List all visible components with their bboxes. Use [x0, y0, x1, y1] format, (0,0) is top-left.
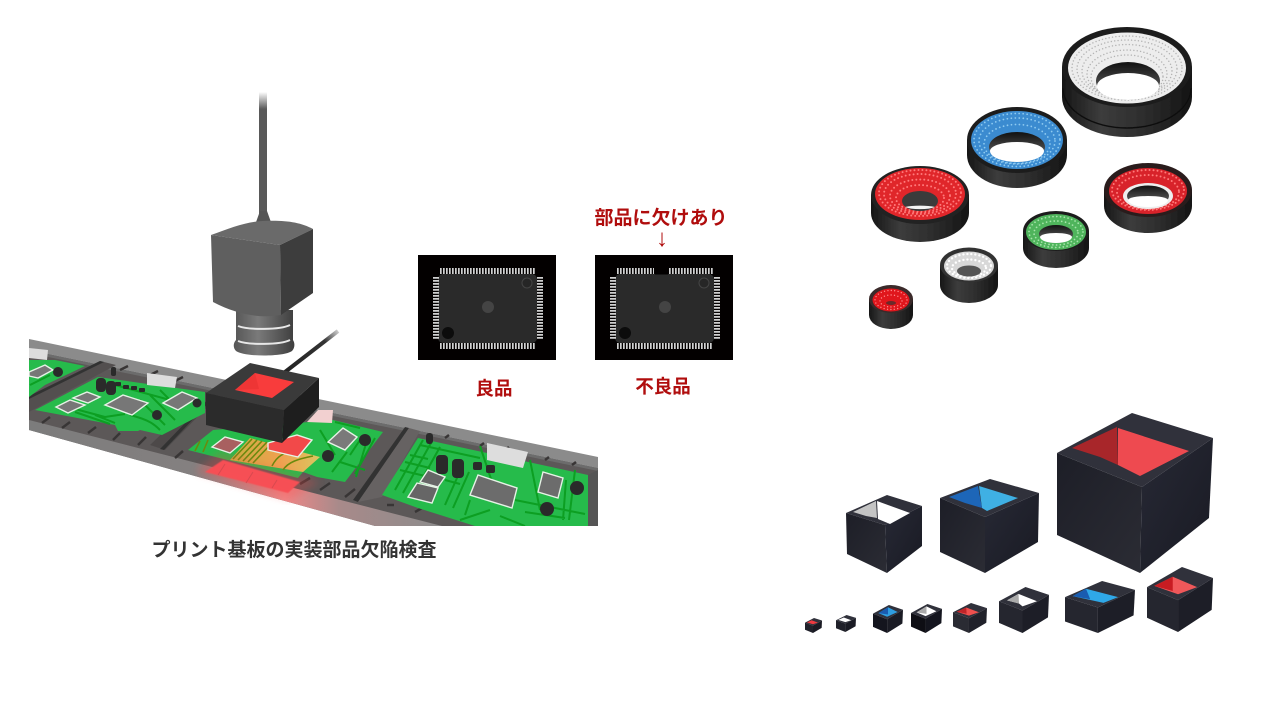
- conveyor belt: [29, 339, 598, 526]
- arrow: pointing to defect: ↓: [656, 225, 668, 252]
- surface mount chips: [29, 365, 563, 508]
- capacitors: [53, 367, 584, 516]
- small light: red low: [953, 603, 987, 633]
- small square light row: [805, 567, 1213, 633]
- PCB boards: [29, 360, 588, 526]
- ring light: red large: [871, 166, 969, 242]
- camera lens: [234, 310, 294, 356]
- ring light: tiny red: [869, 285, 913, 329]
- inspection image: defective part: [595, 255, 733, 360]
- small light: blue wide: [1065, 581, 1135, 633]
- inspection image: good part: [418, 255, 556, 360]
- square light: large red: [1057, 413, 1213, 573]
- ring light: small white: [940, 248, 998, 303]
- connectors: [29, 348, 528, 468]
- square light: medium white: [846, 495, 922, 573]
- square light: medium blue: [940, 479, 1039, 573]
- small light: blue: [873, 605, 903, 633]
- ring lights group: [869, 27, 1192, 329]
- small light: tiny red: [805, 618, 822, 633]
- small light: white wide: [999, 587, 1049, 633]
- orange lit zone on board: [230, 438, 320, 472]
- label: good part: 良品: [475, 378, 513, 399]
- ring light: large white: [1062, 27, 1192, 137]
- small light: red tall: [1147, 567, 1213, 632]
- dividers: [29, 361, 116, 412]
- ring light: blue: [967, 107, 1067, 188]
- light cable: [285, 331, 338, 372]
- label: defect note: 部品に欠けあり: [594, 206, 728, 229]
- ring light: green: [1023, 211, 1089, 268]
- square lights group: [805, 413, 1213, 633]
- caption: プリント基板の実装部品欠陥検査: [151, 538, 437, 561]
- red glow on belt: [205, 460, 300, 493]
- illustration: PCB inspection conveyor with camera and light: [29, 92, 598, 526]
- square red light unit: [206, 363, 319, 443]
- camera body: [211, 211, 313, 356]
- small light: tiny white: [836, 615, 856, 632]
- line camera cable: [259, 92, 267, 214]
- small light: white: [911, 604, 942, 633]
- belt slats: [42, 366, 576, 523]
- ring light: red deep: [1104, 163, 1192, 233]
- label: defective part: 不良品: [635, 376, 691, 397]
